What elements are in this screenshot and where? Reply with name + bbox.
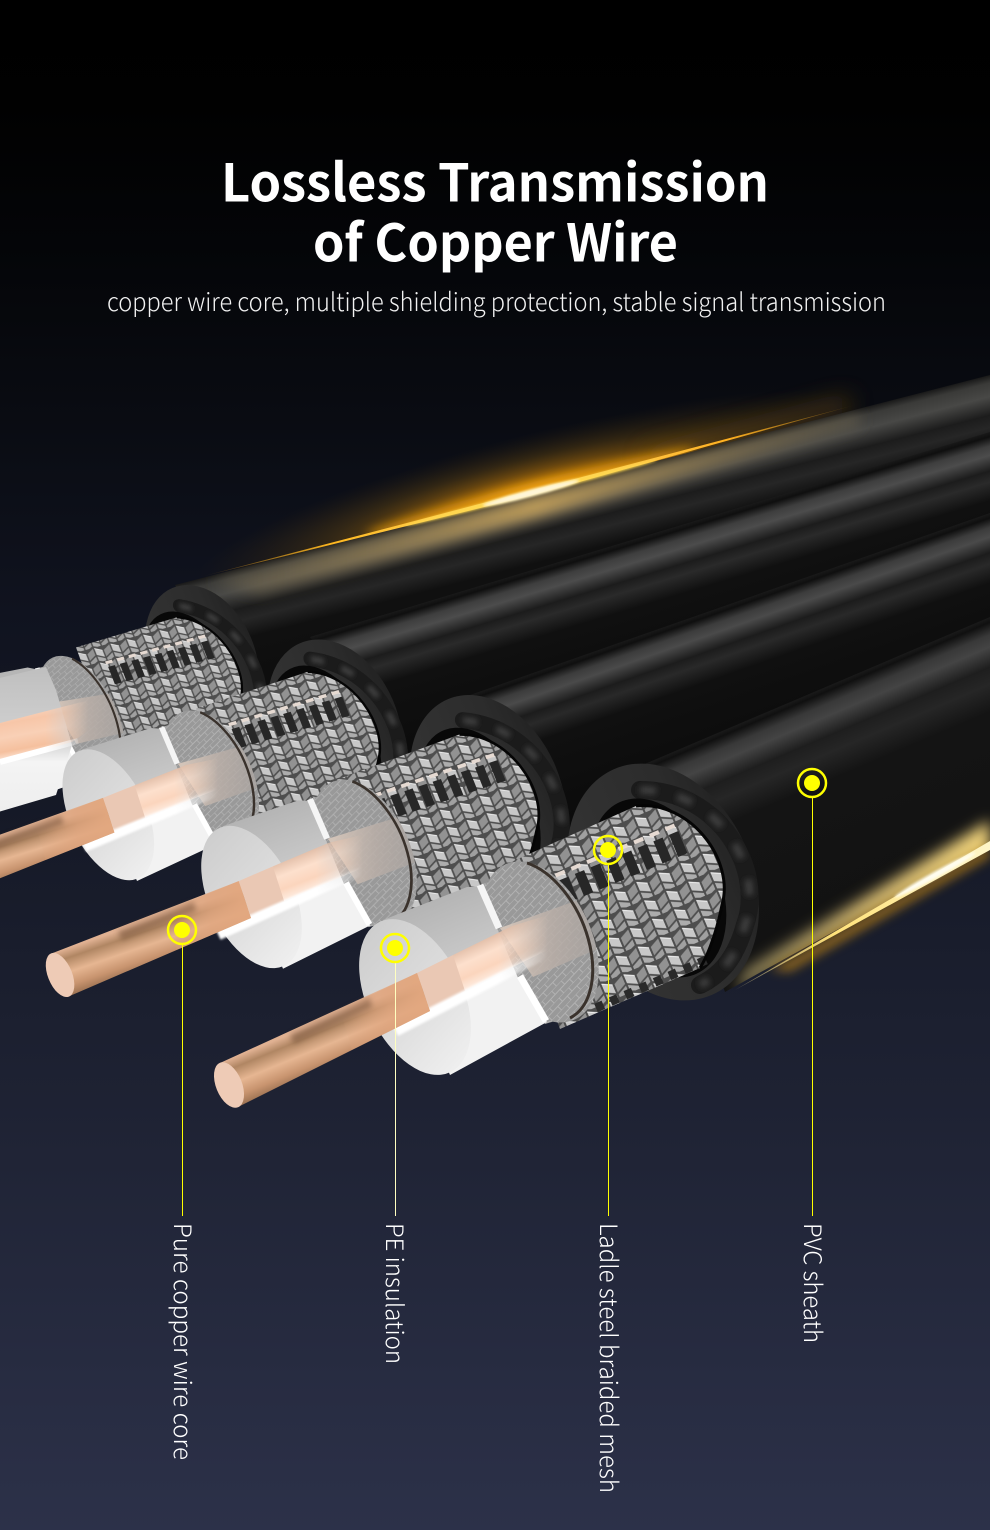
title bbox=[221, 142, 769, 276]
cable 4 insulation bbox=[336, 843, 622, 1093]
cable 1 foil and insulation bbox=[0, 623, 142, 830]
cable 2 braid bbox=[196, 635, 403, 866]
cable 4 sheath tube bbox=[640, 617, 990, 992]
cable 2 sheath tube bbox=[310, 432, 990, 760]
callout: pure copper wire core: Pure copper wire core bbox=[167, 1223, 202, 1460]
callout: pure copper wire core bbox=[167, 916, 202, 1460]
cable 4 sheath end bbox=[532, 733, 794, 1031]
cable 2 copper core bbox=[0, 780, 114, 922]
title: of Copper Wire bbox=[313, 202, 678, 276]
cable 1 braid bbox=[76, 581, 263, 795]
cable 1 (back) bbox=[0, 375, 990, 830]
cable 2 insulation bbox=[44, 683, 278, 907]
cable 4 reflection bbox=[735, 820, 990, 992]
illustration: four coaxial cables bbox=[0, 350, 990, 1112]
golden light streak on front cable bbox=[735, 841, 990, 990]
callout: PE insulation: PE insulation bbox=[379, 1223, 414, 1364]
cable 4 braid bbox=[500, 777, 753, 1029]
cable 2 bbox=[0, 432, 990, 922]
cable 1 sheath tube bbox=[175, 375, 990, 700]
cable 1 inner core bbox=[0, 702, 82, 764]
cable 3 inner core bbox=[216, 824, 367, 950]
golden light streak on top cable bbox=[200, 405, 855, 577]
cable 3 braid bbox=[337, 699, 565, 944]
cable 1 sheath end bbox=[124, 567, 280, 749]
callout: ladle steel braided mesh: Ladle steel braided mesh bbox=[593, 1223, 628, 1493]
cable 3 sheath end bbox=[381, 671, 595, 917]
cable 1 warm reflection bbox=[210, 412, 860, 594]
cable 2 inner core bbox=[82, 745, 222, 865]
cable 4 (front) bbox=[208, 617, 990, 1112]
cable 3 copper core bbox=[40, 867, 251, 1014]
callout: PE insulation bbox=[379, 934, 414, 1364]
cable 3 bbox=[40, 513, 990, 1014]
title: Lossless Transmission bbox=[221, 142, 769, 216]
cable 2 sheath end bbox=[242, 618, 428, 832]
callout: PVC sheath: PVC sheath bbox=[797, 1223, 832, 1343]
cable 3 sheath tube bbox=[470, 513, 990, 850]
callout: ladle steel braided mesh bbox=[593, 836, 628, 1493]
cable 4 copper core bbox=[208, 973, 430, 1112]
cable 3 insulation bbox=[181, 755, 438, 992]
cable 1 insulation extension bbox=[0, 667, 72, 813]
callout: PVC sheath bbox=[797, 769, 832, 1343]
cable 4 inner core bbox=[393, 915, 552, 1036]
golden glow behind top cable bbox=[183, 350, 879, 636]
subtitle: copper wire core, multiple shielding protection, stable signal transmission bbox=[107, 283, 886, 319]
